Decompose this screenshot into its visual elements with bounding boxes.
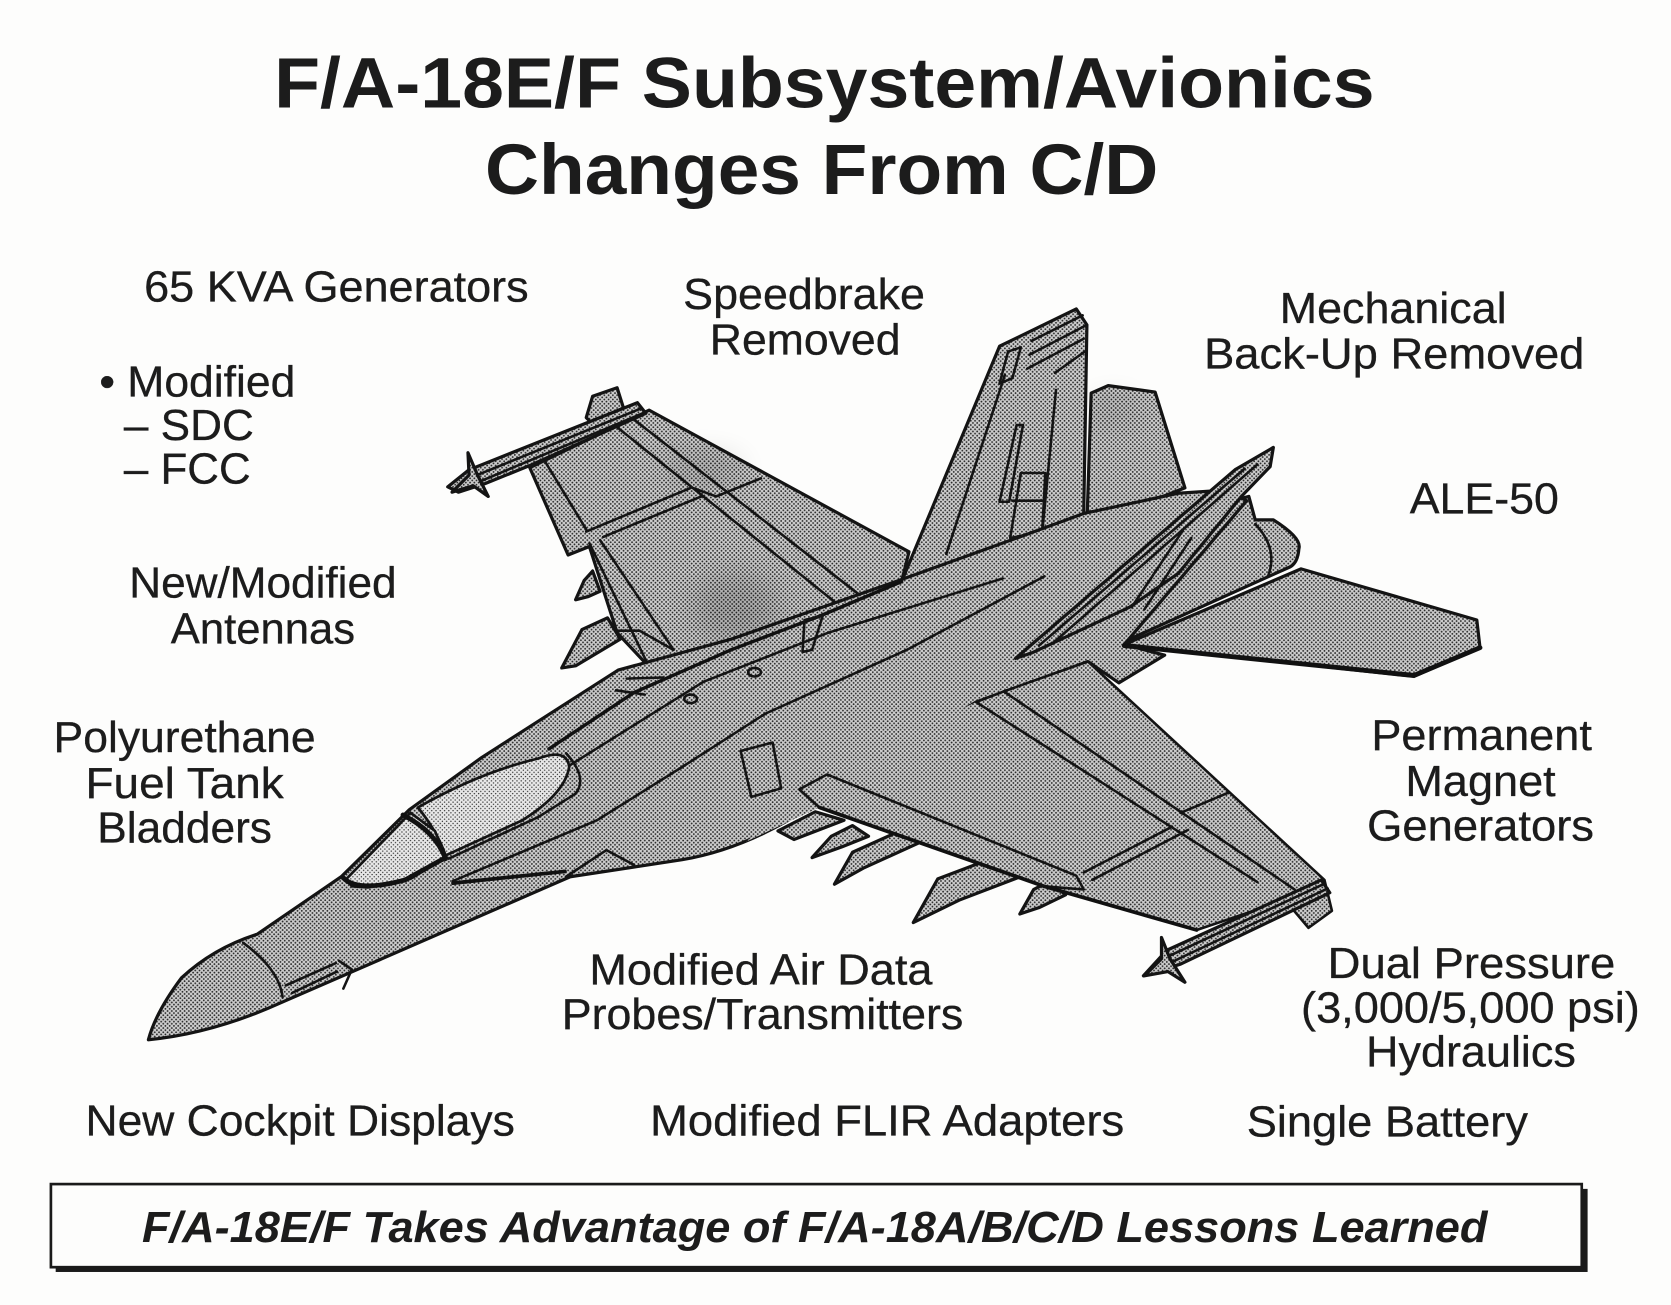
canopy bbox=[343, 753, 580, 887]
callout box: lessons learned bbox=[51, 1184, 1588, 1272]
label: Dual Pressure Hydraulics: Hydraulics bbox=[1366, 1027, 1576, 1076]
label: Permanent Magnet Generators bbox=[1367, 711, 1594, 851]
label: Dual Pressure Hydraulics bbox=[1301, 939, 1640, 1076]
label: Permanent Magnet Generators: Magnet bbox=[1405, 757, 1556, 806]
label: Modified FLIR Adapters: Modified FLIR Adapters bbox=[650, 1097, 1124, 1146]
near wing underwing stores bbox=[778, 812, 1066, 923]
label: Mechanical Back-Up Removed bbox=[1204, 284, 1584, 379]
horizontal stabilizer bbox=[1124, 569, 1480, 676]
title: Changes From C/D bbox=[485, 130, 1158, 210]
far wing bbox=[530, 410, 909, 667]
label: New/Modified Antennas bbox=[129, 559, 397, 653]
far wingtip fin bbox=[586, 388, 624, 423]
near fin bbox=[1016, 447, 1273, 658]
label: Single Battery: Single Battery bbox=[1247, 1098, 1528, 1147]
fuselage detail lines bbox=[243, 576, 1044, 997]
label: Mechanical Back-Up Removed: Back-Up Removed bbox=[1204, 330, 1584, 379]
label: Permanent Magnet Generators: Permanent bbox=[1371, 711, 1592, 760]
label: Dual Pressure Hydraulics: Dual Pressure bbox=[1328, 939, 1615, 988]
label: 65 KVA Generators: 65 KVA Generators bbox=[144, 262, 529, 311]
near wingtip missile bbox=[1143, 880, 1330, 982]
illustration: F/A-18E/F aircraft bbox=[148, 309, 1480, 1040]
fuselage bbox=[148, 490, 1247, 1040]
callout box: lessons learned: F/A-18E/F Takes Advantage of F/A-18A/B/C/D Lessons Learned bbox=[142, 1203, 1489, 1252]
label: Speedbrake Removed: Speedbrake bbox=[683, 270, 925, 319]
label: Permanent Magnet Generators: Generators bbox=[1367, 802, 1594, 851]
label: Modified SDC FCC bbox=[99, 357, 295, 494]
label: New/Modified Antennas: Antennas bbox=[171, 604, 355, 653]
label: Modified SDC FCC: – FCC bbox=[124, 445, 251, 494]
label: New/Modified Antennas: New/Modified bbox=[129, 559, 397, 608]
label: Modified SDC FCC: – SDC bbox=[124, 401, 254, 450]
label: Dual Pressure Hydraulics: (3,000/5,000 psi) bbox=[1301, 984, 1640, 1033]
label: Speedbrake Removed bbox=[683, 270, 925, 365]
label: Modified Air Data Probes/Transmitters: Modified Air Data bbox=[589, 945, 933, 994]
label: Modified Air Data Probes/Transmitters bbox=[562, 945, 963, 1039]
title: F/A-18E/F Subsystem/Avionics bbox=[274, 44, 1375, 124]
label: Modified Air Data Probes/Transmitters: Probes/Transmitters bbox=[562, 990, 963, 1039]
label: Speedbrake Removed: Removed bbox=[710, 316, 900, 365]
far vertical tail bbox=[1087, 386, 1185, 524]
engine nozzle bbox=[1130, 496, 1299, 639]
halftone shading patches bbox=[665, 399, 1135, 639]
label: New Cockpit Displays: New Cockpit Displays bbox=[86, 1097, 515, 1146]
label: ALE-50: ALE-50 bbox=[1410, 474, 1559, 523]
main vertical tail bbox=[902, 309, 1087, 582]
title bbox=[274, 44, 1375, 210]
label: Modified SDC FCC: • Modified bbox=[99, 357, 295, 406]
label: Polyurethane Fuel Tank Bladders bbox=[54, 713, 316, 853]
label: Mechanical Back-Up Removed: Mechanical bbox=[1280, 284, 1507, 333]
far wing underwing stores bbox=[562, 571, 620, 668]
label: Polyurethane Fuel Tank Bladders: Bladders bbox=[97, 804, 272, 853]
far wingtip missile bbox=[448, 403, 646, 496]
near wing bbox=[746, 662, 1332, 930]
label: Polyurethane Fuel Tank Bladders: Fuel Tank bbox=[86, 759, 284, 808]
label: Polyurethane Fuel Tank Bladders: Polyurethane bbox=[54, 713, 316, 762]
